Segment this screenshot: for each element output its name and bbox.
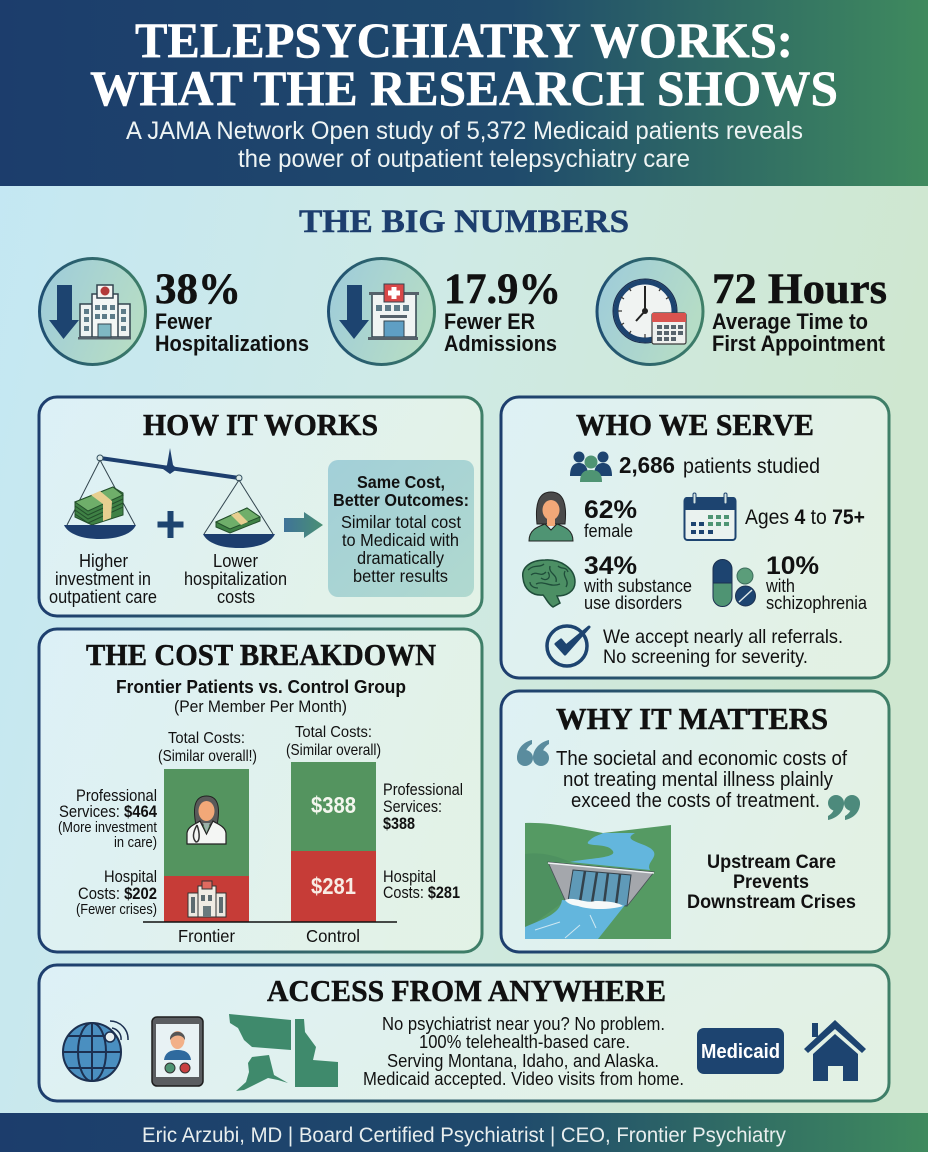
stat: 34% substance use: use disorders bbox=[584, 593, 682, 613]
badge: medicaid bbox=[697, 1028, 784, 1074]
text: upstream care: Downstream Crises bbox=[687, 892, 856, 913]
icon: closing quote bbox=[828, 795, 860, 820]
label: lower hospitalization bbox=[184, 551, 287, 607]
heading: who we serve: WHO WE SERVE bbox=[576, 407, 814, 442]
icon: house bbox=[804, 1020, 866, 1081]
label: control hospital costs: Hospital bbox=[383, 868, 436, 886]
icon: state maps bbox=[229, 1014, 338, 1091]
money stack left bbox=[75, 487, 123, 525]
title bbox=[90, 12, 838, 116]
label: lower hospitalization: hospitalization bbox=[184, 569, 287, 589]
stat: 72 hours: Average Time to bbox=[712, 309, 868, 334]
icon: people group bbox=[570, 452, 612, 482]
label: higher investment: outpatient care bbox=[49, 587, 157, 607]
label: frontier hospital costs: (Fewer crises) bbox=[76, 902, 157, 918]
label: control total: (Similar overall) bbox=[286, 742, 381, 759]
panel: access from anywhere bbox=[39, 965, 889, 1101]
icon: hospital with down arrow bbox=[40, 258, 146, 364]
icon: hospital bbox=[188, 881, 226, 917]
label: lower hospitalization: Lower bbox=[213, 551, 258, 571]
stat: 62% female: 62% bbox=[584, 496, 637, 524]
panel: why it matters bbox=[501, 691, 889, 952]
label: frontier total bbox=[158, 730, 257, 765]
subtitle: A JAMA Network Open study of 5,372 Medicaid patients reveals bbox=[126, 117, 803, 145]
text: referrals: We accept nearly all referrals. bbox=[603, 626, 843, 648]
callout: same cost, better outcomes: Similar total cost bbox=[341, 512, 461, 532]
text: access details: No psychiatrist near you? No problem. bbox=[382, 1014, 665, 1034]
bar: frontier bbox=[164, 769, 249, 922]
subheading: chart title bbox=[116, 676, 406, 716]
callout: same cost, better outcomes: Better Outcomes: bbox=[333, 490, 469, 510]
label: frontier hospital costs: Hospital bbox=[104, 868, 157, 886]
callout: same cost, better outcomes bbox=[328, 460, 474, 597]
stat: 34% substance use bbox=[583, 552, 692, 613]
subheading: chart title: Frontier Patients vs. Control Group bbox=[116, 676, 406, 697]
x-axis labels: Control bbox=[306, 926, 360, 946]
header banner bbox=[0, 0, 928, 186]
icon: brain bbox=[523, 560, 575, 607]
label: frontier professional services: Services: $464 bbox=[59, 803, 158, 821]
quote text: not treating mental illness plainly bbox=[563, 769, 833, 791]
label: frontier hospital costs: Costs: $202 bbox=[78, 885, 157, 903]
stat: 38% fewer hospitalizations: 38% bbox=[155, 266, 241, 313]
bar: control: $281 bbox=[311, 873, 356, 899]
label: frontier total: Total Costs: bbox=[168, 730, 245, 747]
stat: 62% female bbox=[584, 496, 637, 541]
bar: control: $388 bbox=[311, 792, 356, 818]
subheading: chart title: (Per Member Per Month) bbox=[174, 697, 347, 716]
badge: medicaid: Medicaid bbox=[701, 1041, 780, 1063]
text: access details bbox=[363, 1014, 684, 1089]
label: frontier professional services: (More investment bbox=[58, 820, 157, 836]
icon: clock and calendar bbox=[597, 258, 703, 364]
label: control hospital costs: Costs: $281 bbox=[383, 884, 460, 902]
text: referrals: No screening for severity. bbox=[603, 646, 808, 668]
label: frontier professional services: Professional bbox=[76, 787, 157, 805]
quote text bbox=[556, 748, 847, 812]
text: access details: Medicaid accepted. Video visits from home. bbox=[363, 1069, 684, 1089]
stat: 17.9% fewer ER admissions: 17.9% bbox=[444, 266, 561, 313]
subtitle: the power of outpatient telepsychiatry care bbox=[238, 145, 690, 173]
stat: 72 hours: 72 Hours bbox=[712, 266, 887, 313]
x-axis labels bbox=[178, 926, 360, 946]
label: control total bbox=[286, 724, 381, 759]
label: lower hospitalization: costs bbox=[217, 587, 255, 607]
icon: calendar bbox=[684, 493, 736, 540]
stat: 34% substance use: with substance bbox=[583, 576, 692, 596]
stacked bar chart bbox=[143, 762, 397, 946]
title: TELEPSYCHIATRY WORKS: bbox=[135, 12, 793, 68]
stat: 2,686 patients: 2,686 bbox=[619, 452, 675, 478]
stat: 10% schizophrenia: 10% bbox=[766, 552, 819, 580]
label: control professional services: Professional bbox=[383, 781, 463, 799]
map: montana bbox=[229, 1014, 291, 1050]
label: frontier professional services bbox=[58, 787, 158, 851]
panel: the cost breakdown bbox=[39, 629, 482, 952]
panel: who we serve bbox=[501, 397, 889, 678]
stat: 10% schizophrenia: schizophrenia bbox=[766, 593, 868, 613]
stat: 62% female: female bbox=[584, 521, 633, 541]
label: higher investment: investment in bbox=[55, 569, 151, 589]
footer bar bbox=[0, 1113, 928, 1152]
text: upstream care: Prevents bbox=[733, 872, 809, 893]
icon: opening quote bbox=[517, 740, 549, 766]
footer bar: Eric Arzubi, MD | Board Certified Psychiatrist | CEO, Frontier Psychiatry bbox=[142, 1124, 786, 1147]
callout: same cost, better outcomes: better results bbox=[353, 566, 448, 586]
icon: doctor bbox=[187, 796, 226, 844]
heading: access from anywhere: ACCESS FROM ANYWHERE bbox=[267, 973, 666, 1008]
label: frontier hospital costs bbox=[76, 868, 157, 918]
text: access details: 100% telehealth-based care. bbox=[419, 1032, 630, 1052]
label: control hospital costs bbox=[383, 868, 460, 902]
label: higher investment bbox=[49, 551, 157, 607]
text: access details: Serving Montana, Idaho, and Alaska. bbox=[387, 1051, 659, 1071]
text: referrals bbox=[603, 626, 843, 668]
heading: cost breakdown: THE COST BREAKDOWN bbox=[86, 637, 436, 672]
stat: 34% substance use: 34% bbox=[584, 552, 637, 580]
stat: 72 hours bbox=[597, 258, 887, 364]
label: higher investment: Higher bbox=[79, 551, 128, 571]
icon: woman bbox=[529, 492, 573, 541]
heading: how it works: HOW IT WORKS bbox=[143, 407, 378, 442]
label: control professional services bbox=[383, 781, 463, 833]
callout: same cost, better outcomes: Same Cost, bbox=[357, 472, 445, 492]
label: frontier total: (Similar overall!) bbox=[158, 748, 257, 765]
stat: 38% fewer hospitalizations: Fewer bbox=[155, 309, 212, 334]
map: alaska bbox=[236, 1055, 288, 1091]
stat: 10% schizophrenia bbox=[765, 552, 868, 613]
stat: 17.9% fewer ER admissions bbox=[328, 258, 561, 364]
icon: plus bbox=[158, 511, 184, 538]
illustration: dam and river bbox=[525, 823, 671, 939]
stat: 2,686 patients: patients studied bbox=[683, 455, 820, 478]
stat: 2,686 patients bbox=[619, 452, 820, 478]
stat: 17.9% fewer ER admissions: Admissions bbox=[444, 331, 557, 356]
label: frontier professional services: in care) bbox=[114, 835, 157, 851]
bar: control bbox=[291, 762, 376, 922]
icon: globe with wifi bbox=[63, 1021, 128, 1081]
stat: 72 hours: First Appointment bbox=[712, 331, 886, 356]
subtitle bbox=[126, 117, 803, 173]
callout: same cost, better outcomes: to Medicaid with bbox=[342, 530, 459, 550]
stat: 38% fewer hospitalizations: Hospitalizations bbox=[155, 331, 309, 356]
quote text: exceed the costs of treatment. bbox=[571, 790, 820, 812]
icon: arrow bbox=[284, 512, 323, 538]
heading: the big numbers: THE BIG NUMBERS bbox=[299, 204, 629, 240]
callout: same cost, better outcomes: dramatically bbox=[357, 548, 444, 568]
stat: 17.9% fewer ER admissions: Fewer ER bbox=[444, 309, 535, 334]
money stack right bbox=[216, 508, 260, 533]
label: control total: Total Costs: bbox=[295, 724, 372, 741]
quote text: The societal and economic costs of bbox=[556, 748, 847, 770]
icon: check circle bbox=[547, 626, 589, 666]
icon: pills bbox=[713, 560, 756, 606]
text: upstream care bbox=[687, 852, 856, 913]
stat: 10% schizophrenia: with bbox=[765, 576, 795, 596]
icon: ER building with down arrow bbox=[328, 258, 434, 364]
heading: why it matters: WHY IT MATTERS bbox=[556, 701, 828, 736]
icon: tablet video call bbox=[152, 1017, 203, 1086]
text: upstream care: Upstream Care bbox=[707, 852, 836, 873]
map: idaho bbox=[295, 1019, 338, 1087]
title: WHAT THE RESEARCH SHOWS bbox=[90, 60, 838, 116]
label: control professional services: $388 bbox=[383, 815, 415, 833]
label: control professional services: Services: bbox=[383, 798, 442, 816]
x-axis labels: Frontier bbox=[178, 926, 235, 946]
stat: 38% fewer hospitalizations bbox=[40, 258, 309, 364]
panel: how it works bbox=[39, 397, 482, 616]
icon: balance scale with money bbox=[64, 448, 275, 548]
stat: ages: Ages 4 to 75+ bbox=[745, 506, 865, 529]
